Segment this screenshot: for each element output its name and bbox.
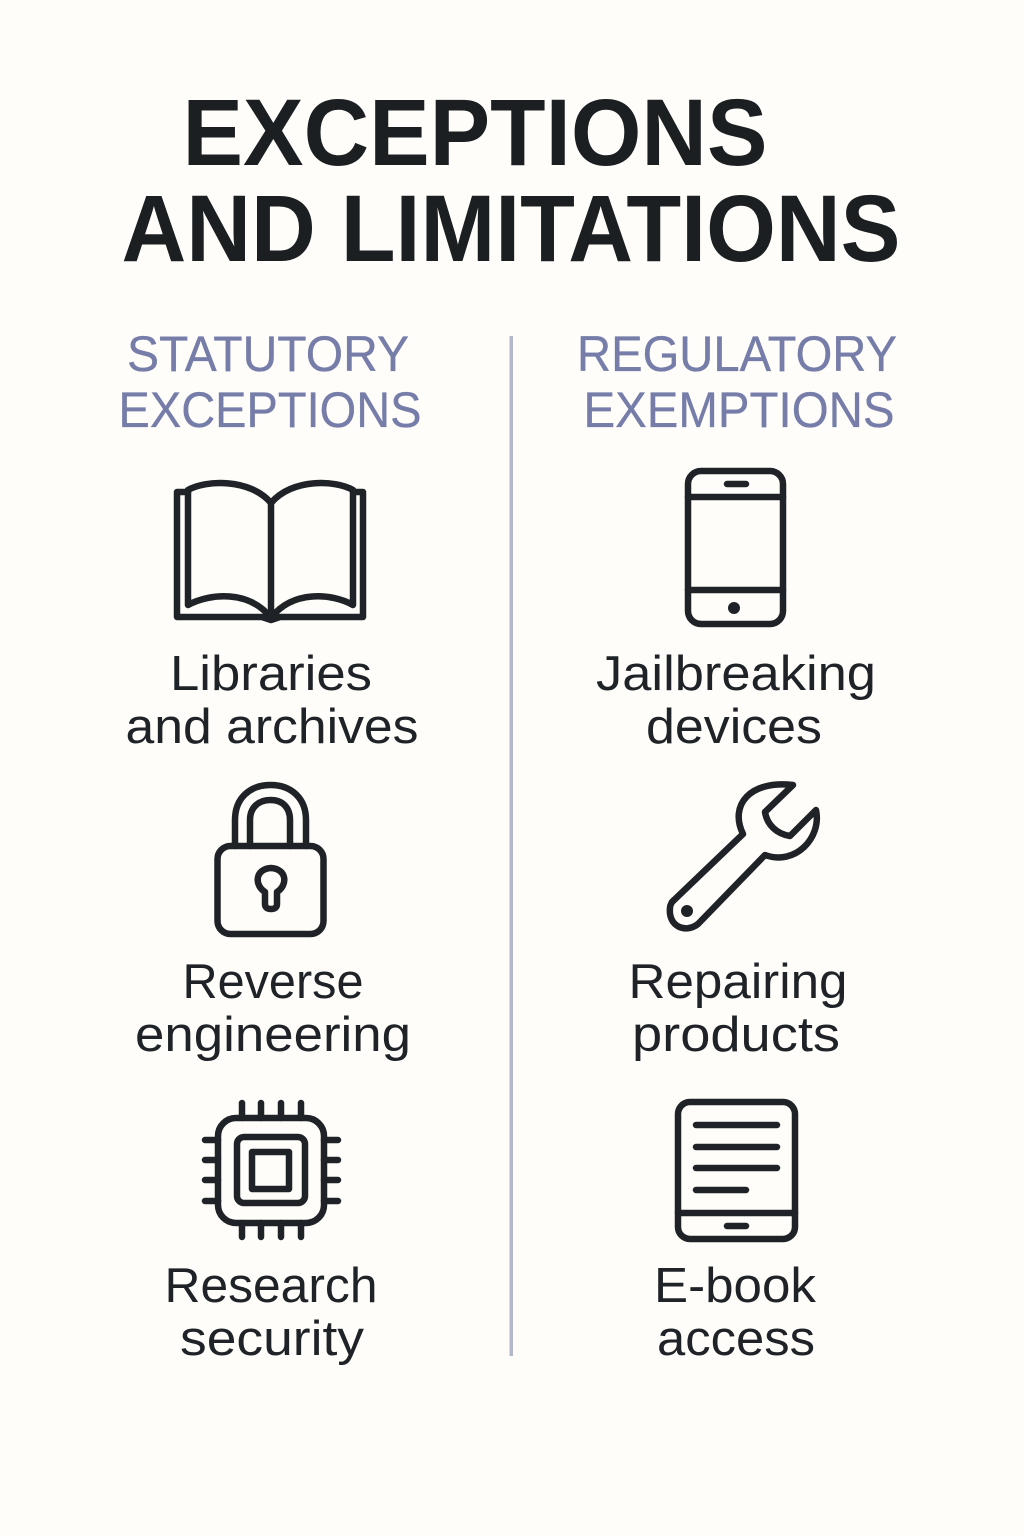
- label: research security: [164, 1259, 378, 1366]
- right column heading: REGULATORY: [577, 326, 897, 382]
- label: e-book access: E-book: [654, 1259, 817, 1313]
- title: EXCEPTIONS: [182, 80, 768, 186]
- label: research security: security: [180, 1312, 365, 1366]
- label: reverse engineering: [135, 955, 411, 1062]
- icon: microchip: [205, 1103, 338, 1237]
- icon: open book: [177, 483, 363, 620]
- icon: wrench: [670, 784, 817, 928]
- right column heading: [577, 326, 897, 438]
- label: jailbreaking devices: [596, 647, 876, 754]
- label: libraries and archives: Libraries: [170, 647, 372, 701]
- icon: smartphone: [688, 471, 783, 624]
- label: e-book access: access: [657, 1312, 815, 1366]
- title: AND LIMITATIONS: [122, 176, 900, 282]
- label: reverse engineering: engineering: [135, 1008, 411, 1062]
- icon: e-book reader: [678, 1102, 795, 1239]
- label: repairing products: Repairing: [628, 955, 848, 1009]
- left column heading: STATUTORY: [127, 326, 409, 382]
- left column heading: [118, 326, 422, 438]
- right column heading: EXEMPTIONS: [584, 382, 894, 438]
- left column heading: EXCEPTIONS: [118, 382, 422, 438]
- label: libraries and archives: and archives: [126, 700, 418, 754]
- label: jailbreaking devices: devices: [646, 700, 822, 754]
- label: e-book access: [654, 1259, 817, 1366]
- label: reverse engineering: Reverse: [182, 955, 364, 1009]
- column divider: [510, 336, 513, 1356]
- label: libraries and archives: [126, 647, 418, 754]
- title: [122, 80, 900, 282]
- label: jailbreaking devices: Jailbreaking: [596, 647, 876, 701]
- label: research security: Research: [164, 1259, 378, 1313]
- icon: padlock: [218, 785, 324, 934]
- label: repairing products: [628, 955, 848, 1062]
- label: repairing products: products: [632, 1008, 840, 1062]
